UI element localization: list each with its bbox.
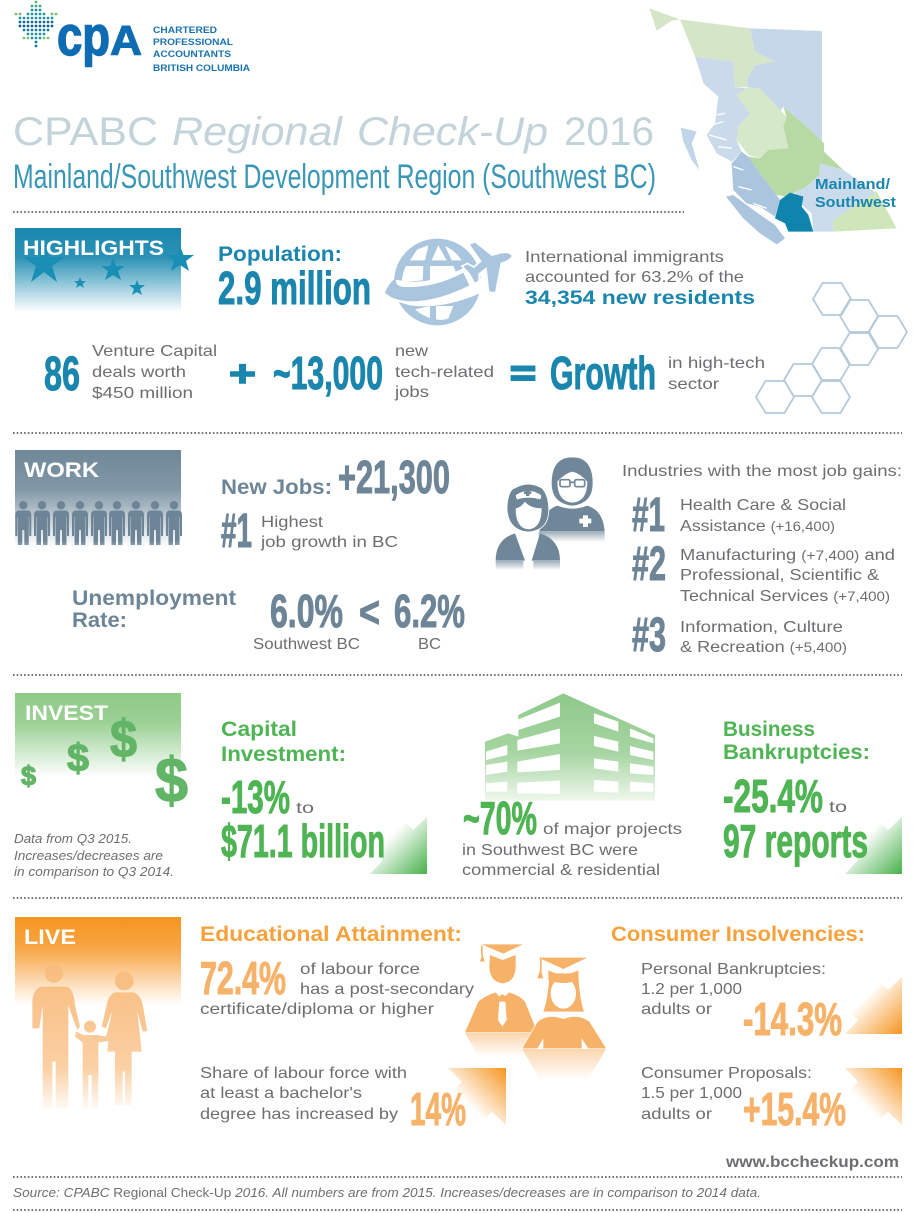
industry 3 [632,609,847,662]
unemployment rate: Rate: [72,609,127,632]
unemployment rate: Unemployment [72,587,236,610]
personal bankruptcies stat: -14.3% [743,993,842,1045]
panel: work: WORK [24,459,99,482]
panel: highlights: HIGHLIGHTS [23,237,164,260]
bachelor's degree stat: Share of labour force with [200,1065,407,1082]
female graduate [522,958,606,1080]
data note: in comparison to Q3 2014. [14,864,174,879]
unemployment rate: BC [418,636,441,653]
tech jobs stat [273,343,494,401]
icon: graduates [465,944,606,1080]
data note [14,831,174,879]
unemployment rate: Southwest BC [253,636,360,653]
industry 2 [632,538,895,605]
consumer proposals stat: +15.4% [743,1083,846,1135]
title: Check-Up [357,110,548,154]
14 percent figure: 14% [410,1083,466,1135]
tech jobs stat: tech-related [395,364,494,381]
population stat: 2.9 million [218,262,371,314]
new jobs stat [221,451,450,503]
icon: maple leaf of dots [16,2,56,46]
panel: live [15,917,181,1108]
major projects stat: ~70% [463,792,537,844]
title: 2016 [564,110,654,154]
consumer proposals stat: Consumer Proposals: [641,1065,812,1082]
data note: Increases/decreases are [14,848,163,863]
industry 3: #3 [632,609,666,662]
major projects stat: commercial & residential [462,862,660,879]
unemployment rate: 6.0% [270,585,343,637]
post-secondary stat [200,952,474,1018]
icon: orange arrow up proposals [845,1068,902,1125]
bachelor's degree stat: at least a bachelor's [200,1085,362,1102]
capital investment stat: Capital [221,718,297,741]
consumer insolvencies heading: Consumer Insolvencies: [611,923,865,946]
tech jobs stat: ~13,000 [273,347,383,399]
industry 1: #1 [632,489,665,542]
icon: dollar signs: $ [21,761,36,791]
logo: CPA British Columbia: A [110,17,142,64]
industry 3: Information, Culture [680,619,843,636]
educational attainment heading: Educational Attainment: [200,923,462,946]
icon: green arrow down bankruptcies [845,817,902,874]
bachelor's degree stat [200,1065,407,1123]
icon: orange arrow up bachelor [448,1068,506,1125]
capital investment stat [221,718,385,867]
map label: Southwest [815,195,896,211]
post-secondary stat: has a post-secondary [300,981,474,998]
industry 1 [632,489,846,542]
venture capital stat [44,343,217,402]
industry 1: Assistance (+16,400) [680,518,835,535]
post-secondary stat: certificate/diploma or higher [200,1001,435,1018]
consumer proposals stat [641,1065,846,1135]
unemployment rate: 6.2% [394,585,465,637]
personal bankruptcies stat: 1.2 per 1,000 [641,981,742,998]
panel: work [15,450,182,547]
highest job growth stat: Highest [261,514,324,531]
venture capital stat: Venture Capital [92,343,217,360]
growth stat: in high-tech [668,355,765,372]
industry 1: Health Care & Social [680,497,846,514]
immigrants text [525,249,755,309]
new jobs stat: New Jobs: [221,476,332,499]
post-secondary stat: 72.4% [200,952,286,1004]
growth stat: sector [668,376,720,393]
population stat: Population: [218,243,342,266]
growth stat: Growth [550,347,656,399]
icon: dollar signs: $ [67,737,89,780]
icon: hexagons [756,283,907,413]
personal bankruptcies stat: adults or [641,1001,713,1018]
industry 2: #2 [632,538,666,591]
business bankruptcies stat: -25.4% [723,770,823,822]
website: www.bccheckup.com [725,1154,899,1171]
industry 2: Manufacturing (+7,400) and [680,547,895,564]
icon: dollar signs [21,710,188,816]
logo: CPA British Columbia: BRITISH COLUMBIA [153,63,250,74]
highest job growth stat: job growth in BC [260,534,398,551]
bachelor's degree stat: degree has increased by [200,1106,398,1123]
male graduate [465,944,537,1057]
icon: green arrow down capital [370,817,427,874]
tech jobs stat: jobs [394,384,429,401]
map label [815,177,896,211]
business bankruptcies stat [723,718,870,867]
industries list [622,463,902,662]
map: British Columbia regions [649,8,897,244]
logo: CPA British Columbia: ACCOUNTANTS [153,49,231,60]
subtitle: Mainland/Southwest Development Region (Southwest BC) [13,158,656,196]
highest job growth stat: #1 [221,505,252,558]
data note: Data from Q3 2015. [14,831,132,846]
personal bankruptcies stat: Personal Bankruptcies: [641,961,826,978]
capital investment stat: Investment: [221,743,346,766]
icon: globe and airplane [383,239,512,325]
immigrants text: 34,354 new residents [525,287,755,309]
icon: orange arrow down bankruptcies [845,977,902,1034]
population stat [218,243,371,314]
title: CPABC [13,110,158,154]
icon: row of workers [15,501,182,545]
logo: CPA British Columbia: PROFESSIONAL [153,37,233,48]
industry 2: Professional, Scientific & [680,567,879,584]
list heading: Industries with the most job gains: [622,463,902,480]
icon: dollar signs: $ [110,710,137,769]
source note: Source: CPABC Regional Check-Up 2016. All numbers are from 2015. Increases/decreases are in comparison to 2014 data. [13,1185,761,1200]
immigrants text: accounted for 63.2% of the [525,269,744,286]
highest job growth stat [221,505,398,558]
title: Regional [172,110,343,154]
consumer proposals stat: 1.5 per 1,000 [641,1085,742,1102]
venture capital stat: deals worth [92,364,186,381]
immigrants text: International immigrants [525,249,724,266]
tech jobs stat: new [395,343,428,360]
panel: invest [15,693,188,816]
unemployment rate [72,585,465,653]
major projects stat [462,792,682,879]
icon: stars [23,242,194,295]
industry 3: & Recreation (+5,400) [680,639,847,656]
capital investment stat: to [296,800,314,817]
plus sign: + [229,353,256,394]
logo: CPA British Columbia: CHARTERED [153,25,217,36]
panel: invest: INVEST [25,702,108,725]
icon: building [485,693,655,801]
venture capital stat: 86 [44,348,80,401]
panel: live: LIVE [24,926,76,949]
icon: doctor and nurse [496,457,605,570]
title [13,110,654,154]
equals sign: = [510,352,536,393]
new jobs stat: +21,300 [338,451,450,503]
capital investment stat: $71.1 billion [221,815,385,867]
unemployment rate: < [359,588,380,637]
personal bankruptcies stat [641,961,842,1045]
panel: highlights [15,228,194,312]
venture capital stat: $450 million [92,385,193,402]
business bankruptcies stat: Business [723,718,815,741]
icon: family [32,964,147,1108]
major projects stat: of major projects [543,821,682,838]
consumer proposals stat: adults or [641,1106,713,1123]
map label: Mainland/ [815,177,890,193]
post-secondary stat: of labour force [300,961,420,978]
major projects stat: in Southwest BC were [462,842,638,859]
business bankruptcies stat: to [829,799,847,816]
business bankruptcies stat: Bankruptcies: [723,741,870,764]
icon: dollar signs: $ [155,746,188,816]
capital investment stat: -13% [221,771,290,823]
logo: CPA British Columbia [16,2,250,74]
logo: CPA British Columbia: cp [57,4,110,67]
industry 2: Technical Services (+7,400) [680,588,890,605]
